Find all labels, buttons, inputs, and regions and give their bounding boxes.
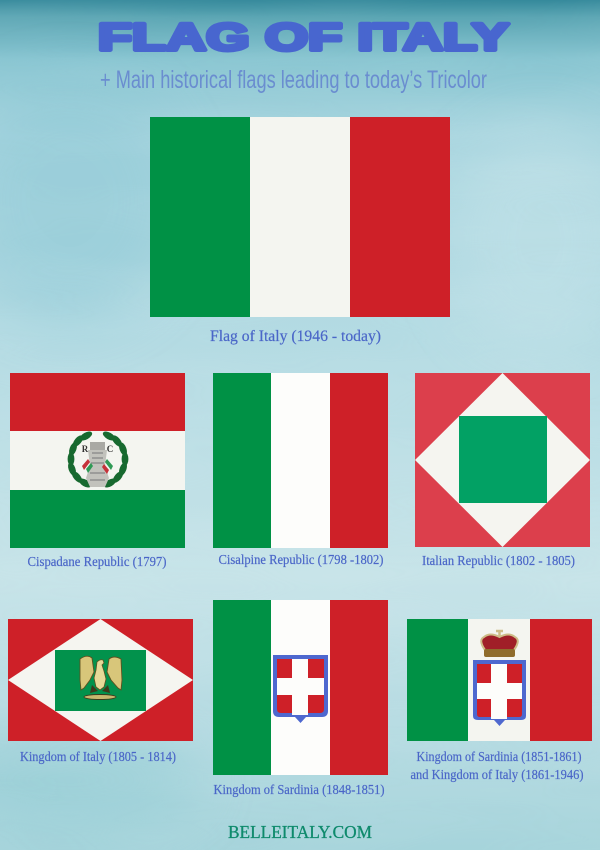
flag: Cisalpine Republic — [213, 373, 388, 548]
caption: Kingdom of Sardinia 1848: Kingdom of Sardinia (1848-1851) — [214, 783, 385, 798]
emblem: golden eagle — [80, 656, 122, 700]
title: FLAG OF ITALY — [98, 17, 509, 59]
flag: Italy today — [150, 117, 450, 317]
footer: website: BELLEITALY.COM — [228, 822, 372, 842]
caption: Italian Republic: Italian Republic (1802 - 1805) — [422, 554, 575, 569]
flag: Cispadane Republic — [10, 373, 185, 548]
shield — [473, 660, 526, 726]
caption: Cisalpine Republic: Cisalpine Republic (1798 -1802) — [218, 553, 384, 568]
flag: Kingdom of Sardinia 1848 — [213, 600, 388, 775]
caption: Flag of Italy: Flag of Italy (1946 - today) — [210, 328, 381, 345]
emblem: monument with RC: C — [107, 444, 113, 454]
emblem: monument with RC — [82, 442, 113, 487]
caption: Cispadane Republic: Cispadane Republic (1797) — [28, 555, 167, 570]
emblem: monument with RC: R — [82, 444, 89, 454]
flag: Italian Republic — [415, 373, 590, 547]
shield — [273, 655, 328, 723]
flag: Kingdom of Italy — [8, 619, 193, 741]
flag: Kingdom of Sardinia 1851 — [407, 619, 592, 741]
caption: Kingdom of Italy: Kingdom of Italy (1805 - 1814) — [20, 750, 176, 765]
caption: Kingdom of Italy line 2: and Kingdom of Italy (1861-1946) — [410, 768, 584, 783]
crown — [481, 630, 518, 657]
emblem: laurel wreath — [66, 430, 129, 489]
